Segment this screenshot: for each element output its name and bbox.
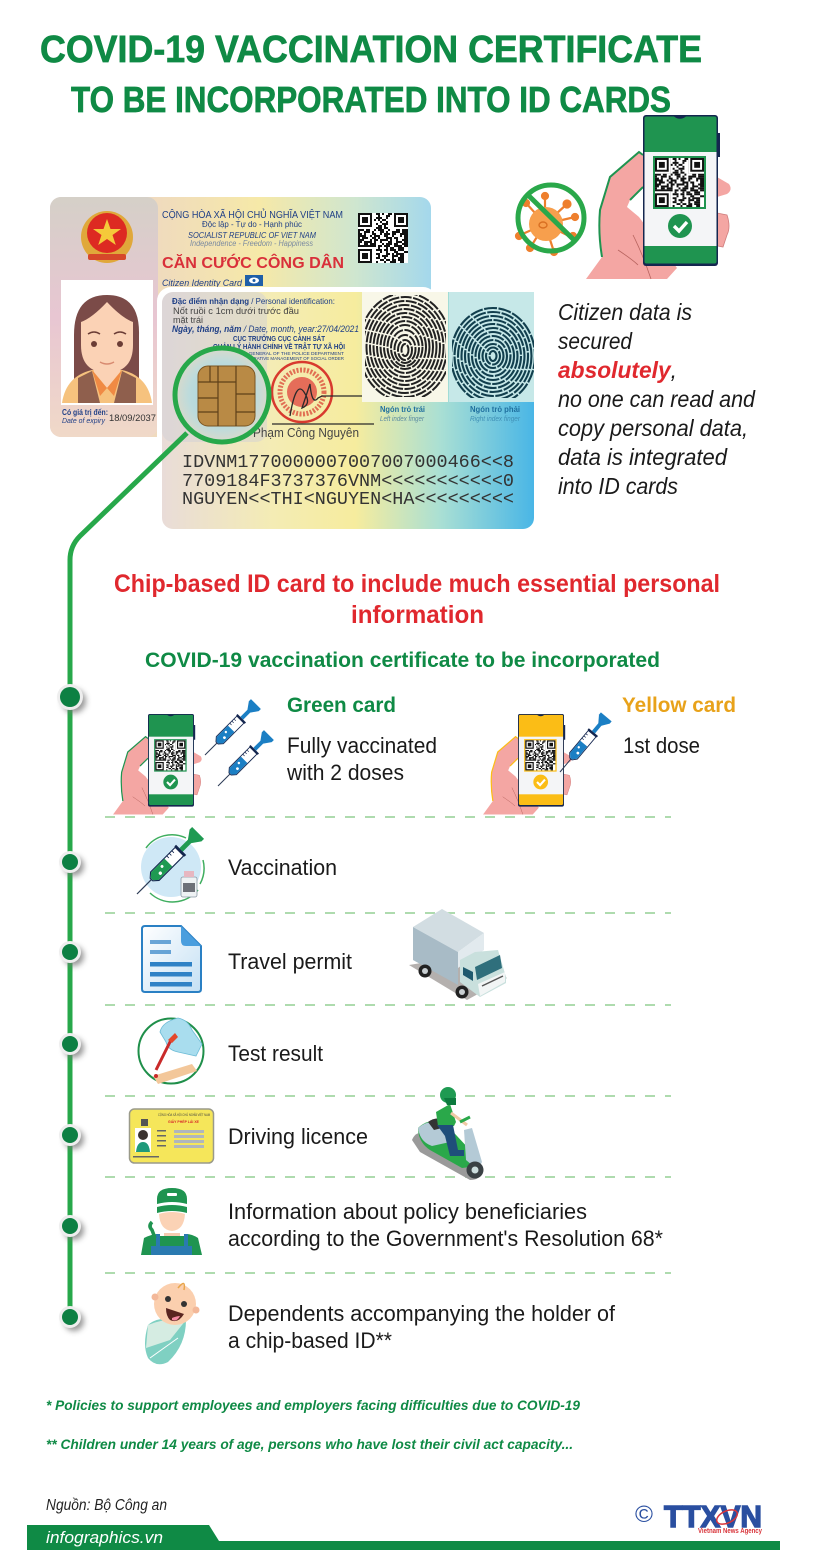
- red seal and signature: [272, 362, 374, 424]
- footnotes: ** Children under 14 years of age, persons who have lost their civil act capacity...: [46, 1436, 573, 1452]
- portrait photo: [61, 280, 153, 405]
- fingerprint captions: Ngón trỏ phải: [470, 404, 520, 414]
- text block: data security statement: no one can read and: [558, 386, 756, 412]
- footer band: infographics.vn: [46, 1528, 163, 1547]
- illustration: truck: [409, 909, 507, 1000]
- card header text: CỘNG HÒA XÃ HỘI CHỦ NGHĨA VIỆT NAM: [162, 208, 343, 221]
- label: dependents: Dependents accompanying the holder of: [228, 1301, 616, 1326]
- title: [40, 29, 702, 120]
- card header text: CĂN CƯỚC CÔNG DÂN: [162, 253, 344, 272]
- text block: data security statement: [558, 299, 756, 499]
- label: vaccination: Vaccination: [228, 855, 337, 880]
- TTXVN logo: TTXVN: [664, 1499, 762, 1534]
- icon: yellow card phone: [483, 714, 572, 815]
- card header text: Independence - Freedom - Happiness: [190, 239, 313, 248]
- fingerprint captions: [380, 404, 521, 423]
- icon: mechanic: [141, 1188, 202, 1255]
- timeline connector line: [70, 433, 187, 1317]
- fingerprint captions: Left index finger: [380, 416, 425, 423]
- expiry date: Có giá trị đến:: [62, 407, 108, 417]
- text block: data security statement: secured: [558, 328, 633, 354]
- TTXVN logo: ©: [635, 1501, 653, 1527]
- fingerprint captions: Right index finger: [470, 416, 521, 423]
- personal identification text: Đặc điểm nhận dạng / Personal identification:: [172, 296, 335, 306]
- green card text: [286, 694, 437, 785]
- icon: vaccination: [131, 827, 204, 902]
- text block: data security statement: data is integrated: [558, 444, 728, 470]
- personal identification text: Ngày, tháng, năm / Date, month, year:27/04/2021: [172, 324, 359, 334]
- left fingerprint: [359, 292, 451, 402]
- machine-readable zone: IDVNM1770000007007007000466<<8: [182, 452, 514, 473]
- icon: driving licence: [130, 1109, 214, 1163]
- personal identification text: mặt trái: [173, 315, 203, 325]
- green card text: Fully vaccinated: [287, 733, 437, 758]
- heading: chip-based ID: Chip-based ID card to include much essential personal: [114, 570, 720, 598]
- label: dependents: [228, 1301, 616, 1353]
- text block: data security statement: into ID cards: [558, 473, 678, 499]
- text block: data security statement: Citizen data is: [558, 299, 692, 325]
- machine-readable zone: NGUYEN<<THI<NGUYEN<HA<<<<<<<<<: [182, 489, 514, 510]
- icon: document: [142, 926, 201, 992]
- yellow card text: Yellow card: [622, 694, 736, 717]
- card header text: Độc lập - Tự do - Hạnh phúc: [202, 219, 303, 229]
- icon: one syringe: [555, 712, 612, 776]
- footnotes: [46, 1397, 580, 1452]
- panel: card face with photo: [50, 197, 431, 437]
- expiry date: [62, 407, 156, 425]
- QR code: [358, 213, 408, 263]
- personal identification text: DIRECTOR GENERAL OF THE POLICE DEPARTMENT: [222, 351, 344, 356]
- illustration: scooter rider: [412, 1087, 484, 1180]
- personal identification text: Nốt ruồi c 1cm dưới trước đầu: [173, 306, 299, 316]
- icon: green card phone: [113, 714, 202, 815]
- panel: card reverse with chip and fingerprints: [157, 287, 535, 532]
- yellow card text: 1st dose: [623, 733, 700, 758]
- icon: driving licence: CỘNG HÒA XÃ HỘI CHỦ NGHĨA VIỆT NAM: [158, 1112, 210, 1117]
- subheading: vaccination certificate: COVID-19 vaccination certificate to be incorporated: [145, 648, 660, 672]
- personal identification text: QUẢN LÝ HÀNH CHÍNH VỀ TRẬT TỰ XÃ HỘI: [213, 341, 345, 351]
- heading: chip-based ID: [114, 570, 720, 629]
- footer band: [27, 1525, 780, 1550]
- emblem: [81, 211, 133, 263]
- personal identification text: [172, 296, 359, 361]
- label: test result: Test result: [228, 1041, 323, 1066]
- icon: phone with green QR certificate in hand: [586, 115, 731, 279]
- yellow card text: [622, 694, 736, 758]
- personal identification text: CỤC TRƯỞNG CỤC CẢNH SÁT: [233, 334, 325, 343]
- text block: data security statement: copy personal data,: [558, 415, 748, 441]
- machine-readable zone: [182, 452, 514, 510]
- icon: two syringes: [200, 699, 274, 791]
- label: policy beneficiaries: Information about policy beneficiaries: [228, 1199, 587, 1224]
- text block: data security statement: absolutely,: [558, 357, 677, 383]
- label: policy beneficiaries: according to the Government's Resolution 68*: [228, 1226, 663, 1251]
- title: COVID-19 VACCINATION CERTIFICATE: [40, 29, 702, 71]
- card header text: Citizen Identity Card: [162, 278, 243, 288]
- expiry date: Date of expiry: [62, 416, 106, 425]
- machine-readable zone: 7709184F3737376VNM<<<<<<<<<<<0: [182, 471, 514, 492]
- right fingerprint: [449, 292, 535, 404]
- footnotes: * Policies to support employees and employers facing difficulties due to COVID-19: [46, 1397, 580, 1413]
- label: travel permit: Travel permit: [228, 949, 352, 974]
- green card text: with 2 doses: [286, 760, 404, 785]
- label: driving licence: Driving licence: [228, 1124, 368, 1149]
- source: Nguồn: Bộ Công an: [46, 1497, 167, 1514]
- icon: crossed-out virus: [516, 185, 584, 255]
- green card text: Green card: [287, 694, 396, 717]
- fingerprint captions: Ngón trỏ trái: [380, 404, 425, 414]
- small flag logo: [245, 275, 263, 286]
- chip magnifier circle: [175, 348, 269, 442]
- timeline markers: [57, 684, 86, 1331]
- card header text: [162, 208, 344, 288]
- card header text: SOCIALIST REPUBLIC OF VIET NAM: [188, 230, 317, 240]
- label: dependents: a chip-based ID**: [228, 1328, 392, 1353]
- icon: driving licence: GIẤY PHÉP LÁI XE: [168, 1119, 199, 1124]
- ID card: back/front side image: [50, 197, 535, 1317]
- title: TO BE INCORPORATED INTO ID CARDS: [71, 79, 671, 120]
- expiry date: 18/09/2037: [109, 413, 156, 423]
- TTXVN logo: Vietnam News Agency: [698, 1528, 762, 1535]
- personal identification text: FOR ADMINISTRATIVE MANAGEMENT OF SOCIAL ORDER: [222, 356, 345, 361]
- dashed dividers: [105, 817, 671, 1273]
- icon: test result: [138, 1018, 204, 1084]
- holder name: Phạm Công Nguyên: [253, 425, 359, 440]
- heading: chip-based ID: information: [351, 601, 484, 629]
- icon: baby: [145, 1283, 200, 1364]
- label: policy beneficiaries: [228, 1199, 663, 1251]
